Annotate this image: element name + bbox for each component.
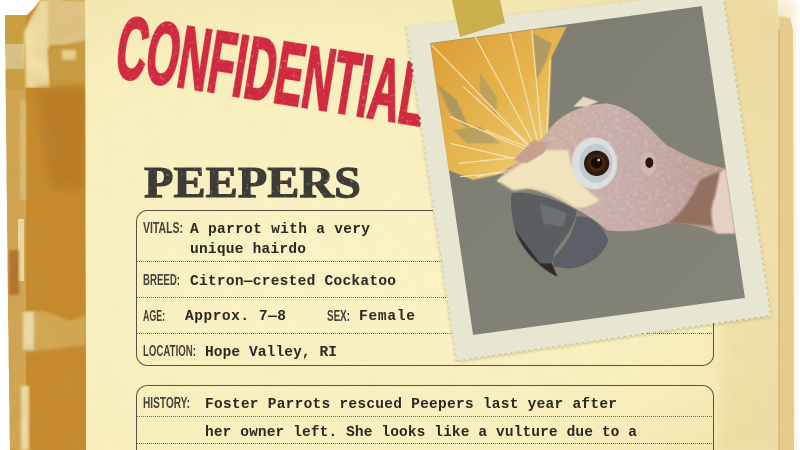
eye bbox=[572, 137, 617, 189]
field: history bbox=[143, 395, 637, 441]
masking tape bbox=[452, 0, 505, 37]
worn folder spine on the left bbox=[0, 0, 86, 450]
field: location: Hope Valley, RI bbox=[205, 345, 337, 361]
field: history: her owner left. She looks like a vulture due to a bbox=[205, 425, 637, 441]
skin texture bbox=[543, 104, 724, 230]
field: history: HISTORY: bbox=[143, 395, 190, 412]
head and neck bbox=[497, 103, 735, 233]
field: breed: BREED: bbox=[143, 272, 180, 289]
field: breed: Citron—crested Cockatoo bbox=[190, 274, 396, 290]
field: sex: SEX: bbox=[327, 308, 350, 325]
ear hole bbox=[640, 153, 656, 175]
field: location bbox=[143, 343, 337, 361]
field: vitals bbox=[143, 220, 370, 258]
field: history: Foster Parrots rescued Peepers last year after bbox=[205, 397, 617, 413]
panel: history record card bbox=[136, 385, 714, 450]
field: vitals: A parrot with a very bbox=[190, 222, 370, 238]
cream face bbox=[497, 150, 600, 208]
field: age: Approx. 7—8 bbox=[185, 309, 286, 325]
text: CONFIDENTIAL bbox=[110, 0, 434, 145]
photo: print with scalloped border bbox=[407, 0, 770, 360]
photo of parrot bbox=[430, 6, 745, 335]
panel: vitals record card bbox=[136, 210, 714, 366]
beak bbox=[511, 193, 608, 277]
title: PEEPERS: PEEPERS bbox=[144, 158, 361, 207]
feather base bbox=[513, 140, 548, 163]
field: location: LOCATION: bbox=[143, 343, 196, 360]
field: age: AGE: bbox=[143, 308, 165, 325]
field: sex bbox=[327, 308, 415, 325]
field: vitals: VITALS: bbox=[143, 220, 183, 237]
field: vitals: unique hairdo bbox=[190, 242, 306, 258]
neck shadow and fluff bbox=[667, 168, 728, 227]
crest feathers bbox=[430, 27, 567, 180]
field: age bbox=[143, 308, 286, 325]
field: sex: Female bbox=[359, 309, 415, 325]
